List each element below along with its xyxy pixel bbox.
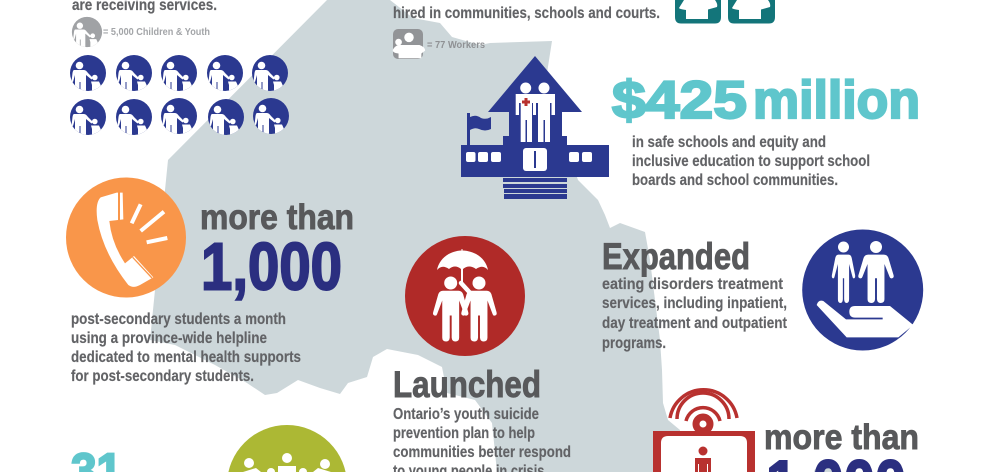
text: eating disorders services: day treatment and outpatient bbox=[602, 315, 787, 332]
stat: more than 1,000 students: 1,000 bbox=[201, 230, 342, 304]
stat: $425 million: million bbox=[753, 71, 920, 130]
icon: telephone helpline bbox=[66, 178, 186, 298]
text: eating disorders services: eating disorders treatment bbox=[602, 276, 783, 293]
text: safe schools bbox=[632, 134, 870, 189]
stat: more than 1,000 students: more than bbox=[200, 197, 354, 237]
legend: 5,000 children and youth: = 5,000 Children & Youth bbox=[103, 26, 210, 38]
stat: more than 1,000 bbox=[764, 417, 919, 472]
icon: school with two people bbox=[461, 56, 609, 199]
text: safe schools: boards and school communities. bbox=[632, 172, 838, 189]
text: post-secondary helpline: dedicated to mental health supports bbox=[71, 349, 301, 366]
text: post-secondary helpline: using a province-wide helpline bbox=[71, 330, 267, 347]
text: safe schools: in safe schools and equity and bbox=[632, 134, 826, 151]
icon: group of people in green circle bbox=[227, 425, 347, 472]
icon grid: children and youth pictogram bbox=[70, 55, 289, 135]
text: eating disorders services: programs. bbox=[602, 335, 666, 352]
icon: hand holding two people bbox=[802, 230, 923, 350]
text: workers hired: hired in communities, schools and courts. bbox=[393, 5, 660, 22]
text: youth suicide prevention plan: communities better respond bbox=[393, 444, 571, 461]
legend: 77 workers bbox=[393, 29, 485, 59]
text: youth suicide prevention plan: prevention plan to help bbox=[393, 425, 535, 442]
text: eating disorders services: services, including inpatient, bbox=[602, 295, 787, 312]
icons: teal workers bbox=[675, 0, 775, 24]
text: eating disorders services bbox=[602, 276, 787, 352]
text: post-secondary helpline bbox=[71, 311, 301, 385]
text: post-secondary helpline: for post-secondary students. bbox=[71, 368, 254, 385]
icon: umbrella over two people bbox=[405, 236, 525, 356]
background map of Ontario bbox=[150, 0, 680, 472]
heading: Expanded: Expanded bbox=[602, 236, 750, 277]
stat: $425 million bbox=[612, 71, 920, 130]
heading: Launched: Launched bbox=[393, 364, 541, 405]
legend: 5,000 children and youth bbox=[72, 17, 210, 47]
text: youth suicide prevention plan bbox=[393, 406, 571, 472]
stat: more than 1,000 students bbox=[200, 197, 354, 304]
stat: $425 million: $425 bbox=[612, 71, 747, 130]
text: safe schools: inclusive education to support school bbox=[632, 153, 870, 170]
text: post-secondary helpline: post-secondary students a month bbox=[71, 311, 286, 328]
icon: emergency device with signal bbox=[653, 390, 755, 472]
legend: 77 workers: = 77 Workers bbox=[427, 39, 485, 51]
text: youth suicide prevention plan: Ontario’s youth suicide bbox=[393, 406, 539, 423]
stat: more than 1,000: more than bbox=[764, 417, 919, 457]
